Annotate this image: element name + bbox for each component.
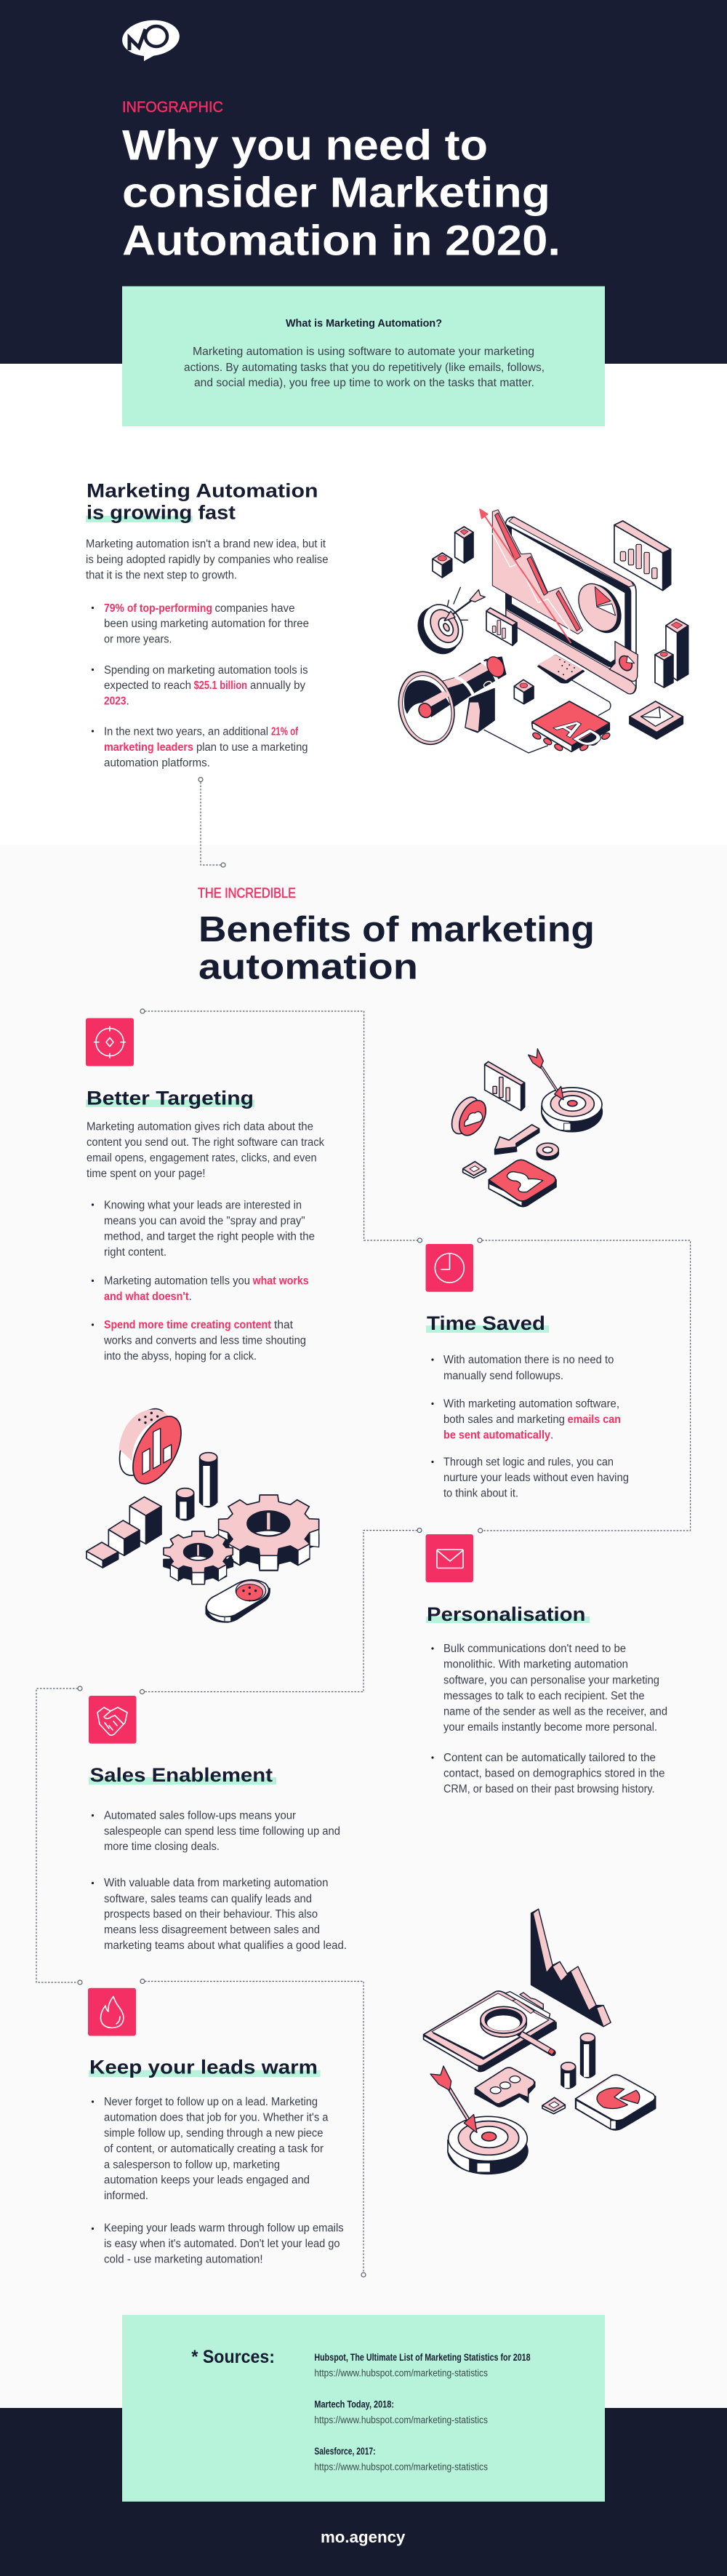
heading: time saved: Time Saved [427, 1312, 545, 1334]
growth bullet list: 2023 [104, 695, 126, 708]
icon: handshake [89, 1696, 137, 1744]
better targeting bullets: Knowing what your leads are interested in [104, 1199, 302, 1211]
target [448, 2128, 528, 2174]
tall column and box left [455, 533, 464, 563]
better targeting intro: email opens, engagement rates, clicks, and even [87, 1152, 317, 1165]
big gear [219, 1495, 319, 1571]
ring [537, 1147, 558, 1160]
speech bubble [475, 2082, 535, 2107]
title: consider Marketing [122, 170, 550, 217]
better targeting bullets: works and converts and less time shouting [103, 1335, 306, 1347]
arrow in target [542, 1067, 560, 1095]
growing fast intro text: is being adopted rapidly by companies who realise [86, 554, 329, 566]
connector: better targeting to time saved [140, 1009, 422, 1243]
small report panel [513, 623, 517, 645]
growing fast intro text: that it is the next step to growth. [86, 570, 237, 582]
source: hubspot: https://www.hubspot.com/marketing-statistics [314, 2368, 488, 2379]
time saved bullets: . [550, 1429, 553, 1441]
time saved bullets: manually send followups. [443, 1370, 563, 1382]
sales enablement bullets: means less disagreement between sales and [104, 1924, 320, 1937]
time saved bullets: both sales and marketing [443, 1413, 565, 1426]
red profile tile [489, 1180, 556, 1207]
rising boxes [129, 1506, 146, 1544]
source: martech: https://www.hubspot.com/marketing-statistics [314, 2414, 488, 2425]
growing fast intro text [86, 538, 329, 582]
benefits heading: automation [198, 947, 418, 986]
growth bullet list: annually by [250, 679, 305, 692]
better targeting intro: content you send out. The right software can track [87, 1136, 324, 1149]
chart disc [110, 1401, 177, 1483]
heading: personalisation: Personalisation [427, 1603, 586, 1625]
sales enablement bullets: Automated sales follow-ups means your [104, 1809, 296, 1822]
panel text: and social media), you free up time to work on the tasks that matter. [194, 377, 534, 389]
growth bullet list: In the next two years, an additional [104, 725, 268, 738]
sales enablement bullets: prospects based on their behaviour. This also [104, 1908, 318, 1921]
time saved bullets: Through set logic and rules, you can [443, 1456, 614, 1468]
footer band [0, 2408, 727, 2576]
section: growing fast heading [86, 480, 318, 523]
panel heading: What is Marketing Automation? [286, 317, 442, 330]
heading: sales enablement: Sales Enablement [90, 1764, 273, 1786]
toggle [206, 1588, 270, 1622]
envelope tile [630, 717, 683, 739]
cylinders [581, 2038, 595, 2078]
time saved bullets [431, 1354, 629, 1499]
growth bullet list: plan to use a marketing [196, 741, 308, 754]
keep leads warm bullets: automation does that job for you. Whether it's a [104, 2112, 329, 2124]
better targeting bullets: what works [252, 1275, 309, 1288]
personalisation bullets [431, 1643, 667, 1795]
personalisation bullets: CRM, or based on their past browsing history. [443, 1783, 654, 1795]
source: martech: Martech Today, 2018: [314, 2399, 394, 2410]
illustration: target, panel, cloud disc, arrow and tile [446, 1049, 602, 1207]
cylinders [200, 1457, 217, 1507]
pie chart [573, 578, 629, 639]
sales enablement bullets: With valuable data from marketing automation [104, 1877, 329, 1889]
illustration: chart disc, columns, gears and toggle [87, 1401, 319, 1622]
connector: time saved to personalisation [478, 1238, 691, 1533]
keep leads warm bullets: Never forget to follow up on a lead. Marketing [104, 2096, 318, 2108]
time saved bullets: to think about it. [443, 1487, 518, 1499]
keep leads warm bullets: informed. [104, 2190, 148, 2202]
keep leads warm bullets [92, 2096, 344, 2266]
clipboard [424, 2022, 556, 2072]
better targeting bullets: . [189, 1291, 192, 1303]
better targeting bullets: means you can avoid the "spray and pray" [104, 1215, 305, 1227]
growth bullet list: or more years. [104, 634, 172, 646]
personalisation bullets: software, you can personalise your marketing [443, 1674, 659, 1686]
personalisation bullets: contact, based on demographics stored in the [443, 1768, 664, 1779]
better targeting intro: Marketing automation gives rich data about the [87, 1120, 313, 1133]
time saved bullets: emails can [568, 1413, 621, 1426]
panel: sources [122, 2315, 605, 2502]
keep leads warm bullets: automation keeps your leads engaged and [104, 2174, 310, 2187]
section: growing fast heading: is growing fast [87, 501, 236, 523]
sources heading: * Sources: [191, 2347, 275, 2367]
section: growing fast heading: Marketing Automation [87, 480, 318, 502]
growth bullet list: 79% of top-performing [104, 602, 212, 615]
growing fast intro text: Marketing automation isn't a brand new idea, but it [86, 538, 326, 550]
benefits heading [198, 910, 595, 986]
target with arrow [410, 600, 467, 661]
right columns [666, 626, 678, 681]
panel text [184, 346, 545, 389]
time saved bullets: With automation there is no need to [443, 1354, 614, 1366]
title: Automation in 2020. [122, 218, 561, 265]
growth bullet list: companies have [215, 602, 295, 615]
growth bullet list: 21% of [271, 725, 299, 738]
sales enablement bullets: software, sales teams can qualify leads and [104, 1893, 312, 1905]
personalisation bullets: messages to talk to each recipient. Set the [443, 1690, 644, 1702]
keep leads warm bullets: cold - use marketing automation! [104, 2254, 263, 2266]
time saved bullets: be sent automatically [443, 1429, 550, 1441]
illustration: monitor, megaphone and AD chip: AD [547, 714, 611, 751]
pie tile [576, 2097, 656, 2130]
icon: clock [426, 1244, 473, 1292]
falling chart [492, 510, 583, 634]
icon: target [86, 1018, 134, 1066]
keep leads warm bullets: a salesperson to follow up, marketing [104, 2158, 280, 2171]
arrow in target [449, 2089, 473, 2126]
source: hubspot [314, 2352, 531, 2379]
title: Why you need to [122, 122, 488, 169]
better targeting bullets: method, and target the right people with the [104, 1231, 315, 1243]
down arrow [495, 1129, 539, 1155]
better targeting bullets: Marketing automation tells you [104, 1275, 250, 1288]
small box centre [514, 686, 524, 704]
growth bullet list: . [126, 695, 129, 708]
personalisation bullets: Content can be automatically tailored to the [443, 1752, 656, 1764]
better targeting intro: time spent on your page! [87, 1168, 205, 1180]
connector: growth to benefits [198, 778, 225, 867]
benefits heading: Benefits of marketing [198, 910, 595, 949]
growth bullet list: marketing leaders [104, 741, 193, 754]
monitor stand [538, 655, 584, 683]
logo [121, 17, 181, 61]
connector: sales enablement to keep leads warm [36, 1686, 82, 1985]
source: salesforce: Salesforce, 2017: [314, 2446, 376, 2457]
time saved bullets: nurture your leads without even having [443, 1472, 629, 1484]
panel text: actions. By automating tasks that you do repetitively (like emails, follows, [184, 362, 545, 374]
sales enablement bullets: more time closing deals. [104, 1841, 220, 1853]
personalisation bullets: Bulk communications don't need to be [443, 1643, 626, 1655]
better targeting bullets: that [274, 1319, 294, 1331]
connector: personalisation to sales enablement [140, 1528, 422, 1694]
illustration: chart, clipboard, magnifier, target and pie tile [424, 1909, 656, 2174]
small tile [463, 1169, 486, 1178]
sales enablement bullets [92, 1809, 347, 1952]
source: martech [314, 2399, 488, 2425]
better targeting bullets [92, 1199, 315, 1363]
megaphone [465, 689, 494, 733]
keep leads warm bullets: Keeping your leads warm through follow up emails [104, 2222, 344, 2235]
growth bullet list: $25.1 billion [194, 679, 247, 692]
source: salesforce [314, 2446, 488, 2472]
growth bullet list: Spending on marketing automation tools is [104, 664, 308, 677]
growth bullet list: automation platforms. [104, 757, 210, 770]
small report sheet [609, 642, 638, 681]
small gear [164, 1531, 233, 1584]
heading: better targeting: Better Targeting [87, 1087, 254, 1109]
source: hubspot: Hubspot, The Ultimate List of Marketing Statistics for 2018 [314, 2352, 531, 2363]
eyebrow: the incredible: THE INCREDIBLE [198, 886, 296, 901]
eyebrow: infographic: INFOGRAPHIC [122, 99, 223, 116]
better targeting bullets: right content. [104, 1246, 166, 1259]
icon: envelope [426, 1534, 473, 1582]
keep leads warm bullets: of content, or automatically creating a task for [104, 2143, 324, 2155]
better targeting intro [87, 1120, 324, 1180]
dark falling chart [531, 1909, 611, 2027]
personalisation bullets: your emails instantly become more personal. [443, 1721, 657, 1734]
report panel [521, 1082, 525, 1111]
panel text: Marketing automation is using software to automate your marketing [193, 346, 534, 358]
cloud disc [446, 1093, 484, 1138]
connector: keep leads warm to sources [140, 1979, 366, 2277]
header band [0, 0, 727, 364]
target [542, 1092, 602, 1132]
keep leads warm bullets: simple follow up, sending through a new piece [104, 2127, 323, 2140]
personalisation bullets: monolithic. With marketing automation [443, 1659, 628, 1671]
monitor body [505, 517, 636, 694]
growth bullet list: expected to reach [104, 679, 191, 692]
footer url: mo.agency [321, 2528, 406, 2546]
source: salesforce: https://www.hubspot.com/marketing-statistics [314, 2461, 488, 2472]
personalisation bullets: name of the sender as well as the receiver, and [443, 1705, 667, 1718]
sales enablement bullets: salespeople can spend less time following up and [104, 1825, 340, 1838]
growth bullet list [92, 602, 309, 770]
small tile [542, 2105, 565, 2114]
keep leads warm bullets: is easy when it's automated. Don't let your lead go [104, 2238, 340, 2250]
better targeting bullets: and what doesn't [104, 1291, 189, 1303]
illustration: monitor, megaphone and AD chip [391, 509, 688, 753]
title [122, 122, 561, 265]
better targeting bullets: into the abyss, hoping for a click. [104, 1350, 257, 1363]
time saved bullets: With marketing automation software, [443, 1397, 619, 1410]
better targeting bullets: Spend more time creating content [104, 1319, 271, 1331]
heading: keep your leads warm: Keep your leads warm [89, 2056, 318, 2078]
AD chip [531, 731, 611, 751]
red trend arrow [483, 514, 571, 642]
icon: flame [88, 1988, 136, 2035]
magnifier [520, 2033, 553, 2053]
panel: what is marketing automation [122, 287, 605, 426]
sales enablement bullets: marketing teams about what qualifies a good lead. [104, 1939, 347, 1952]
report panel right [663, 549, 671, 591]
growth bullet list: been using marketing automation for three [104, 618, 309, 630]
